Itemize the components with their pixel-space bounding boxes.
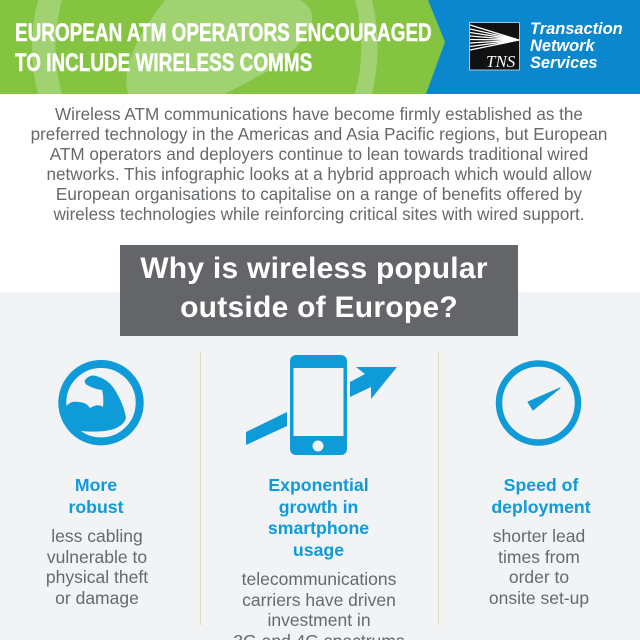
header banner [0, 0, 640, 94]
section heading: Why is wireless popular [140, 252, 488, 285]
section heading [120, 245, 518, 336]
company name: Network [530, 37, 595, 55]
description: or damage [55, 588, 139, 608]
header title [15, 19, 432, 76]
column: smartphone [233, 355, 405, 640]
description: onsite set-up [489, 588, 589, 608]
description: carriers have driven [242, 590, 396, 610]
heading: robust [68, 496, 124, 516]
description: vulnerable to [47, 547, 147, 567]
heading: Exponential [268, 475, 369, 495]
section heading: outside of Europe? [180, 291, 458, 324]
heading: More [75, 475, 117, 495]
icon: gauge [496, 360, 582, 446]
description: times from [498, 547, 580, 567]
heading: growth in [279, 496, 358, 516]
column: speed of deployment [489, 360, 591, 608]
heading: smartphone [268, 518, 369, 538]
intro text: wireless technologies while reinforcing critical sites with wired support. [53, 205, 585, 224]
column: more robust [46, 360, 148, 608]
description [233, 569, 405, 640]
description: order to [509, 567, 569, 587]
description: less cabling [51, 526, 143, 546]
heading [268, 475, 369, 560]
header title: EUROPEAN ATM OPERATORS ENCOURAGED [15, 19, 432, 47]
intro text: networks. This infographic looks at a hybrid approach which would allow [46, 165, 592, 184]
intro text: preferred technology in the Americas and Asia Pacific regions, but European [31, 125, 607, 144]
divider [200, 352, 201, 625]
intro text: ATM operators and deployers continue to lean towards traditional wired [50, 145, 588, 164]
description: shorter lead [493, 526, 585, 546]
heading: Speed of [504, 475, 578, 495]
heading: deployment [491, 496, 591, 516]
icon: TNS logo [469, 22, 520, 71]
description [489, 526, 589, 608]
company name: Transaction [530, 20, 623, 38]
company name [530, 20, 623, 72]
company name: Services [530, 54, 597, 72]
description [46, 526, 148, 608]
heading: usage [293, 540, 344, 560]
description: physical theft [46, 567, 148, 587]
heading [68, 475, 124, 516]
intro text: European organisations to capitalise on a range of benefits offered by [56, 185, 582, 204]
divider [438, 352, 439, 625]
description: investment in [267, 610, 371, 630]
icon: phone and arrow [246, 355, 397, 455]
icon: TNS logo: TNS [486, 52, 516, 71]
heading [491, 475, 591, 516]
description: telecommunications [242, 569, 396, 589]
header title: TO INCLUDE WIRELESS COMMS [15, 48, 312, 76]
grey section background [0, 292, 640, 640]
intro text [31, 105, 607, 224]
icon: flexed arm [58, 360, 144, 446]
intro text: Wireless ATM communications have become firmly established as the [55, 105, 583, 124]
